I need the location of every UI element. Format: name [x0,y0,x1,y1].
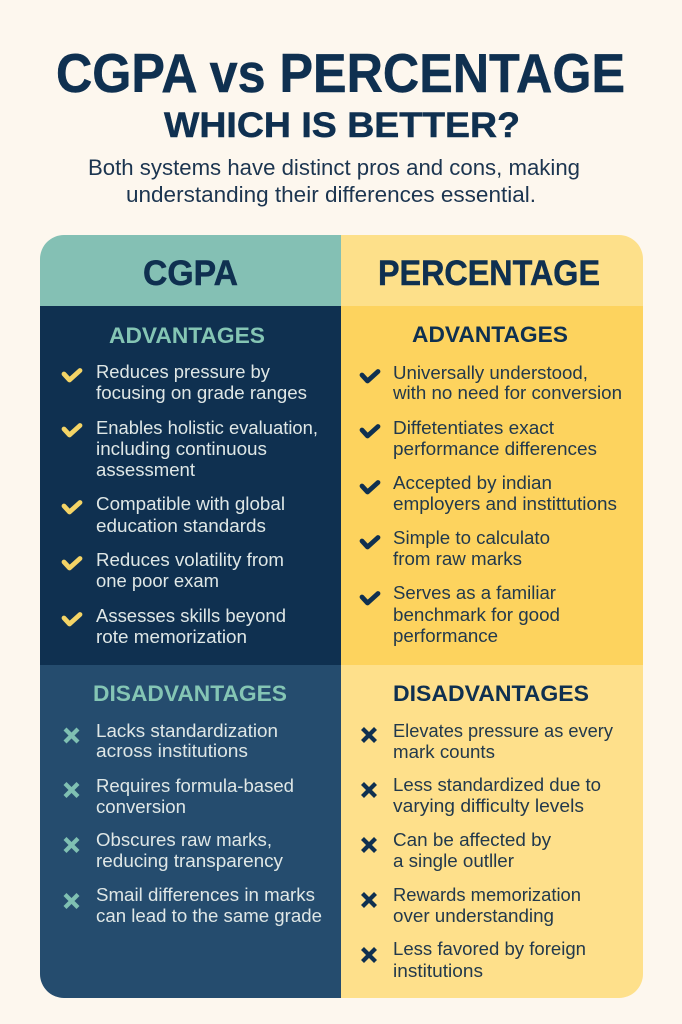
item: holistic evaluation: Enables holistic evaluation, [96,417,318,438]
item: less standardized: varying difficulty levels [393,795,584,816]
item: foreign institutions [362,938,586,981]
item: volatility [64,549,284,591]
item: volatility: Reduces volatility from [96,549,284,570]
item: small differences: can lead to the same grade [96,905,322,926]
item: benchmark: performance [393,625,498,646]
item: standardization: across institutions [96,740,248,761]
item: accepted by employers: employers and instittutions [393,493,617,514]
item: skills [64,605,286,647]
item: skills: rote memorization [96,626,247,647]
panel: Percentage header [341,235,643,306]
panel: Percentage disadvantages [341,665,643,998]
item: benchmark: benchmark for good [393,604,560,625]
panel: CGPA header: CGPA [143,254,238,293]
item: simple to calculate [362,527,550,569]
item: holistic evaluation [64,417,318,480]
main title: CGPA vs PERCENTAGE [56,42,625,104]
item: conversion: conversion [96,796,186,817]
item: less standardized: Less standardized due to [393,774,601,795]
panel: CGPA advantages [40,306,341,665]
item: volatility: one poor exam [96,570,219,591]
heading: DISADVANTAGES [393,681,589,706]
item: global standards [64,493,285,536]
item: exact differences [362,417,597,459]
heading: ADVANTAGES [412,322,568,347]
heading: DISADVANTAGES [93,681,287,706]
item: simple to calculate: from raw marks [393,548,522,569]
item: skills: Assesses skills beyond [96,605,286,626]
item: reduces pressure: Reduces pressure by [96,361,271,382]
item: small differences: Smail differences in marks [96,884,315,905]
item: simple to calculate: Simple to calculato [393,527,550,548]
item: pressure: mark counts [393,741,495,762]
item: holistic evaluation: including continuous [96,438,267,459]
item: reduces pressure: focusing on grade ranges [96,382,307,403]
item: outlier [362,829,552,871]
item: universally understood: with no need for conversion [392,382,622,403]
item: exact differences: Diffetentiates exact [393,417,554,438]
item: outlier: a single outller [393,850,514,871]
item: transparency: reducing transparency [96,850,284,871]
item: accepted by employers: Accepted by indian [393,472,552,493]
panel: CGPA disadvantages [40,665,341,998]
item: transparency [65,829,284,871]
item: universally understood [362,362,622,403]
item: global standards: education standards [96,515,266,536]
intro text [88,155,580,207]
item: less standardized [362,774,601,816]
item: standardization [65,720,278,761]
item: reduces pressure [64,361,307,403]
item: pressure: Elevates pressure as every [393,720,614,741]
panel: CGPA header [40,235,341,306]
title block [56,42,625,207]
item: universally understood: Universally understood, [393,362,588,383]
item: foreign institutions: institutions [393,960,483,981]
item: small differences [65,884,322,926]
item: global standards: Compatible with global [96,493,285,514]
item: conversion: Requires formula-based [96,775,294,796]
item: accepted by employers [362,472,617,514]
subtitle heading: WHICH IS BETTER? [164,106,520,145]
item: pressure [362,720,614,762]
item: foreign institutions: Less favored by foreign [393,938,586,959]
item: standardization: Lacks standardization [96,720,278,741]
panel: Percentage header: PERCENTAGE [378,254,600,293]
item: transparency: Obscures raw marks, [96,829,272,850]
item: memorization [362,884,581,926]
item: memorization: over understanding [393,905,554,926]
intro text: Both systems have distinct pros and cons, making [88,155,580,180]
item: conversion [65,775,294,817]
item: outlier: Can be affected by [393,829,552,850]
item: benchmark [362,582,560,646]
panel: Percentage advantages [341,306,643,665]
comparison table [40,235,643,998]
heading: ADVANTAGES [109,323,265,348]
intro text: understanding their differences essential. [126,182,536,207]
item: exact differences: performance differences [393,438,597,459]
item: memorization: Rewards memorization [393,884,581,905]
item: holistic evaluation: assessment [96,459,195,480]
item: benchmark: Serves as a familiar [393,582,556,603]
